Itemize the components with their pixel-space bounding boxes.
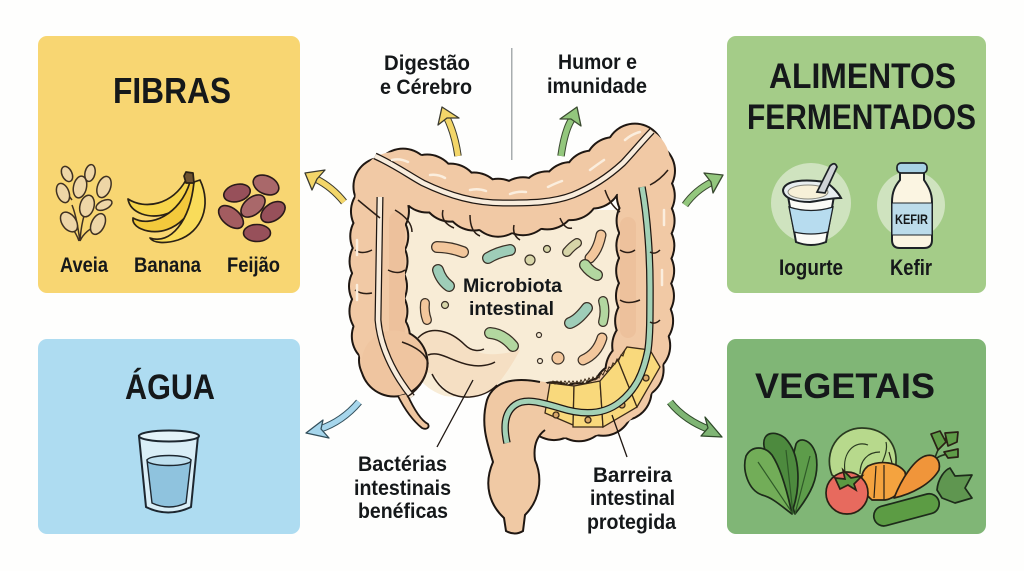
arrow: digestão [438,107,459,156]
label: microbiota intestinal: intestinal [469,298,554,320]
heading: vegetais: VEGETAIS [755,367,935,406]
cecum [362,330,426,396]
label: banana: Banana [134,254,201,277]
heading: água: ÁGUA [125,367,215,407]
heading: alimentos fermentados: FERMENTADOS [747,98,976,137]
icon: pepino e folhas [872,468,972,528]
ascending band [378,197,412,397]
barrier cells [545,347,660,427]
label: humor e imunidade: Humor e [558,51,637,74]
microbiota interior [405,210,625,397]
callout line: barreira [612,415,627,457]
rectum fill [484,380,570,534]
ileum lobe [418,331,520,397]
panel: água [38,339,300,534]
label: bactérias intestinais benéficas: benéficas [358,500,448,523]
icon: iogurte [771,163,851,245]
arrow: vegetais [670,402,722,437]
label: digestão e cérebro: e Cérebro [380,76,472,99]
label: microbiota intestinal: Microbiota [463,275,562,297]
label on bottle: KEFIR [895,211,928,227]
panel: vegetais [727,339,986,534]
icon: feijão [214,171,289,242]
colon outer contour [378,152,646,413]
arrow: fibras [305,170,344,202]
panel: alimentos fermentados [727,36,986,293]
label: bactérias intestinais benéficas: intestinais [354,477,451,500]
label: kefir: Kefir [890,255,932,280]
highlights [357,132,664,300]
label: humor e imunidade: imunidade [547,75,647,98]
label: aveia: Aveia [60,254,108,277]
colon body [378,152,646,413]
callout line: bactérias [437,380,473,447]
arrow: água [306,402,359,438]
arrow: humor [560,107,581,156]
icon: espinafre [745,433,817,514]
icon: banana [128,172,205,242]
icon: aveia [54,164,114,241]
heading: alimentos fermentados: ALIMENTOS [769,57,956,96]
appendix [398,394,429,429]
rectum contour [484,380,545,534]
icon: tomate [826,470,868,514]
label: digestão e cérebro: Digestão [384,52,470,75]
shading [397,220,628,335]
icon: kefir [877,163,945,248]
label: barreira intestinal protegida: protegida [587,511,676,534]
label: feijão: Feijão [227,254,280,277]
label: bactérias intestinais benéficas: Bactérias [358,453,447,476]
illustration: intestino [355,131,668,534]
icon: repolho [829,428,896,482]
ileum contours [418,331,497,397]
label: barreira intestinal protegida: Barreira [593,464,672,487]
transverse band [375,131,652,203]
icon: pimentão [862,452,906,500]
icon: copo de água [139,430,199,512]
label: iogurte: Iogurte [779,255,843,280]
arrow: fermentados [685,173,723,205]
panel: fibras [38,36,300,293]
bacteria [425,235,604,360]
cecum outline [360,328,428,398]
heading: fibras: FIBRAS [113,70,231,111]
label: barreira intestinal protegida: intestinal [590,487,675,510]
icon: cenoura [894,431,958,498]
colon fill [378,152,646,413]
creases [355,170,668,397]
descending band [505,187,650,443]
divider line [511,48,512,160]
